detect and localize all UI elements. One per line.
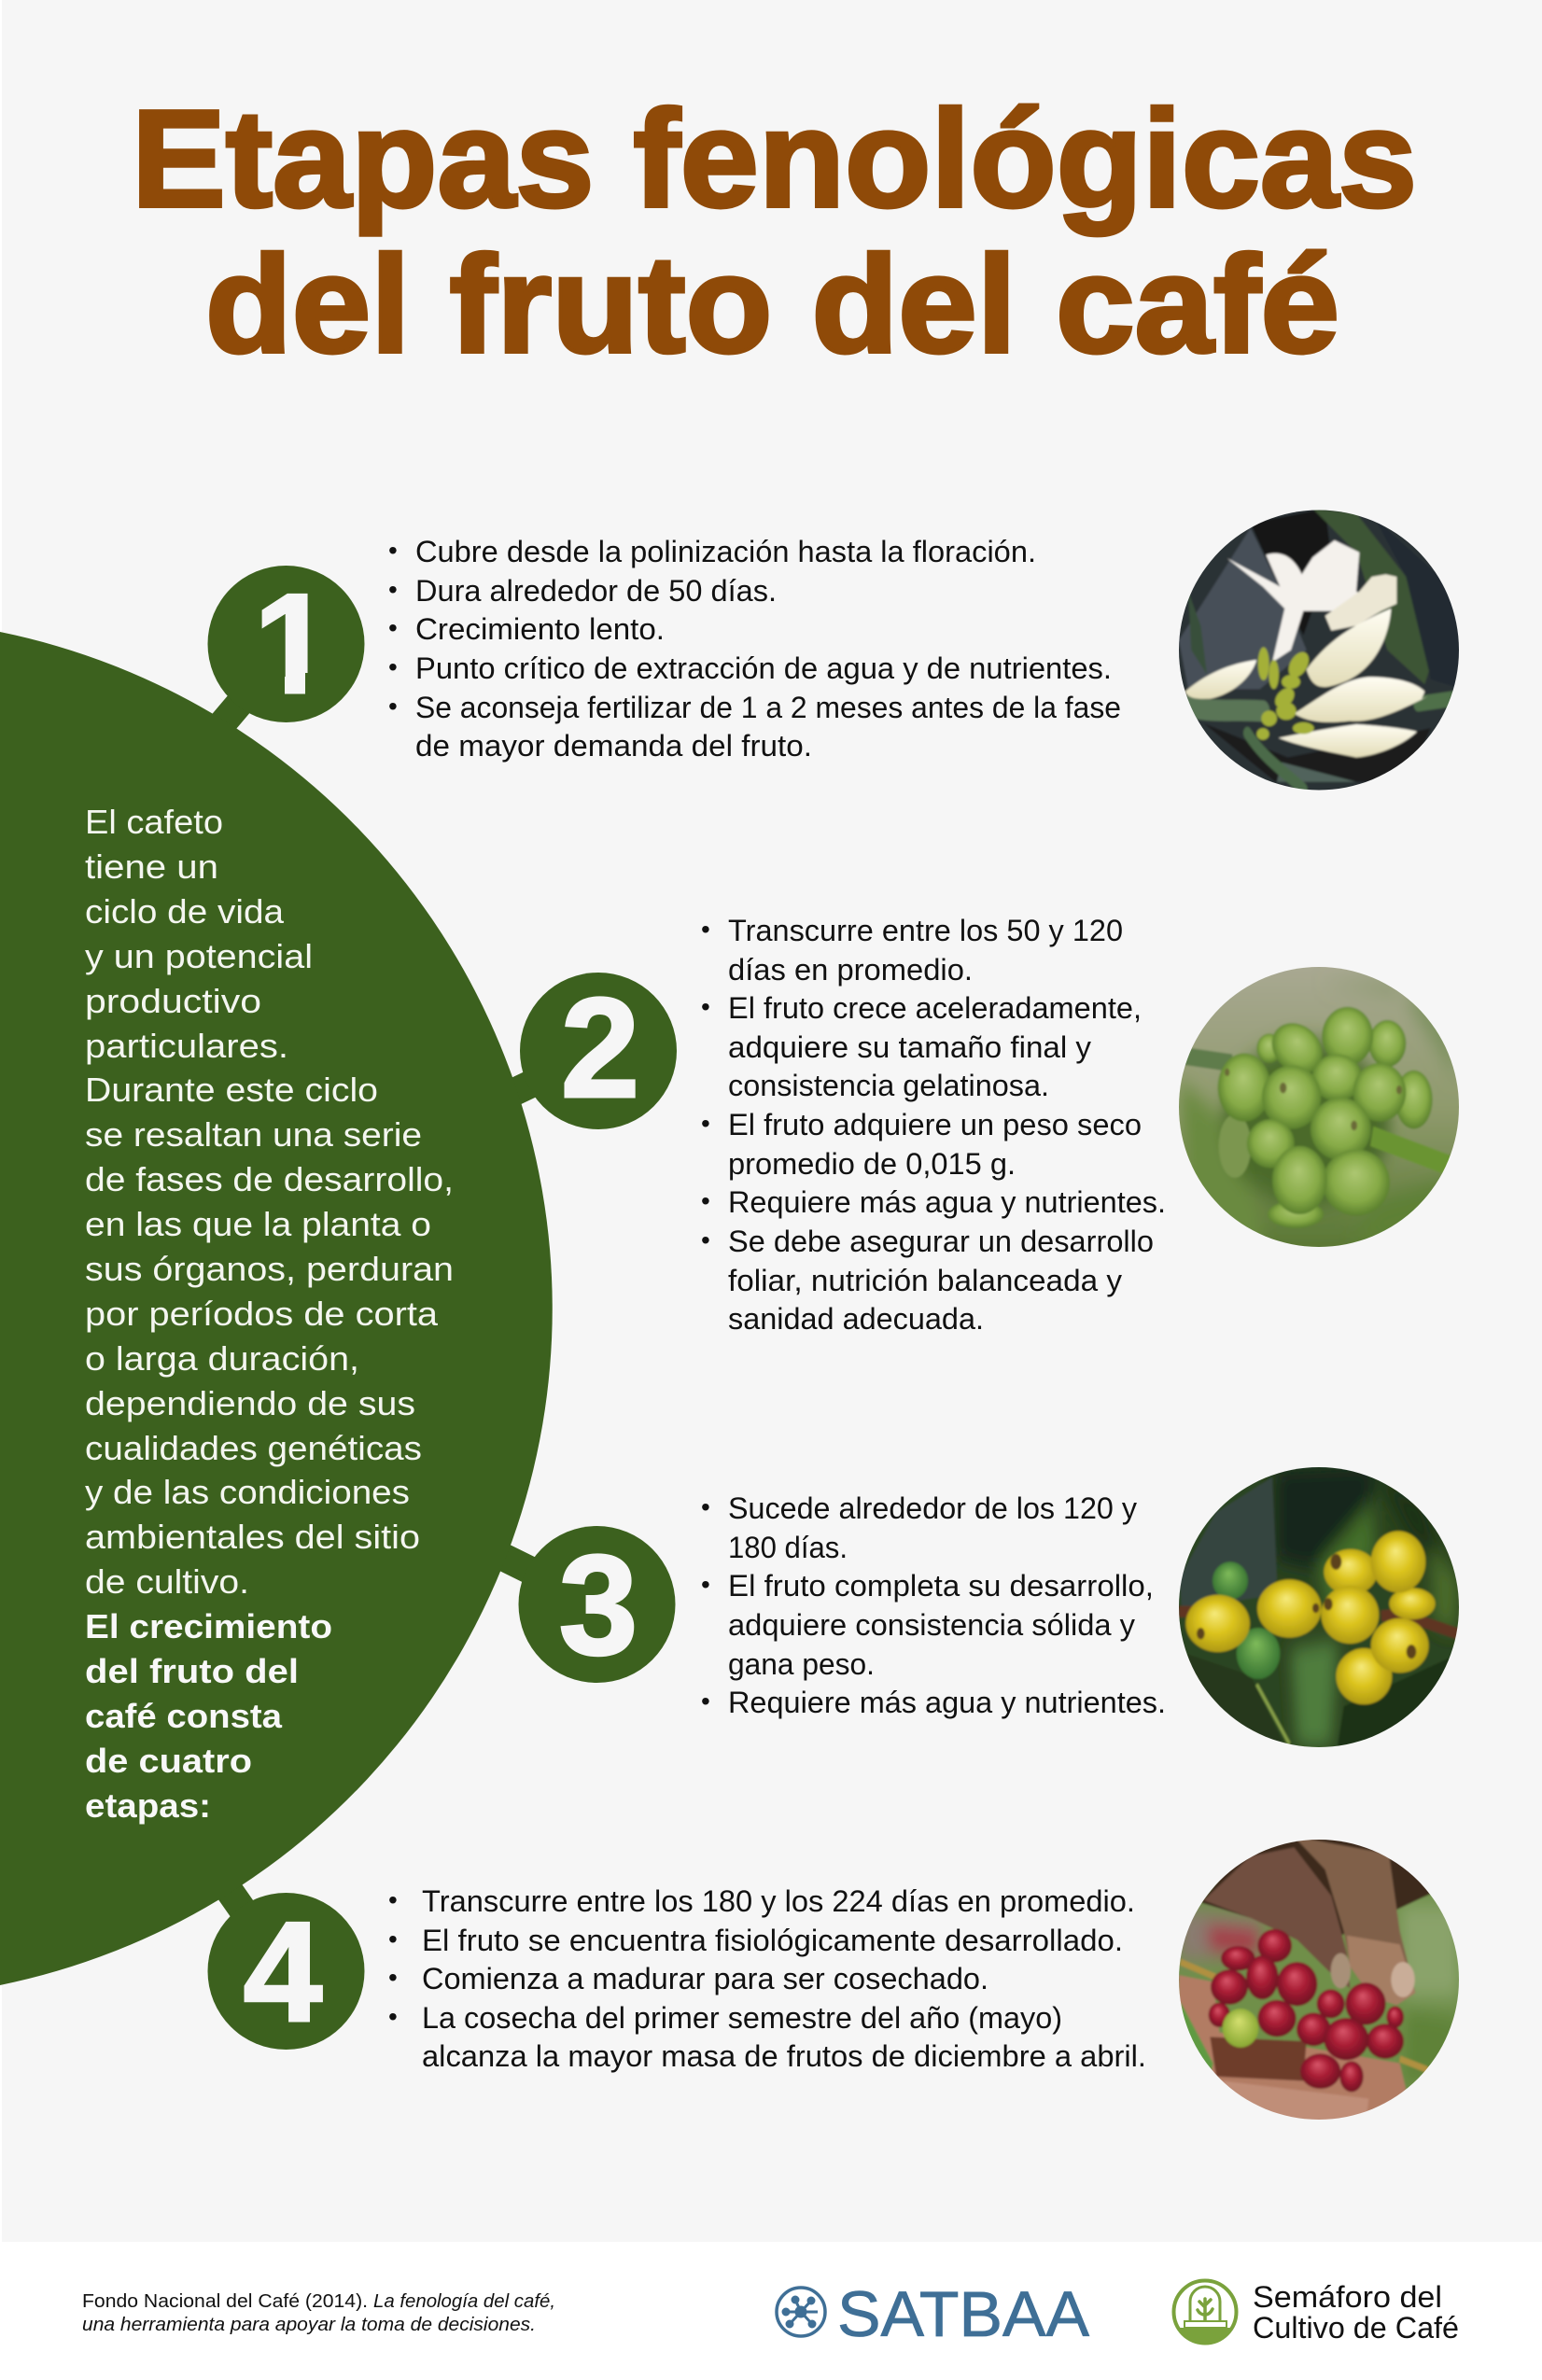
text block: stage 1 bullets: • — [388, 536, 398, 565]
title — [132, 82, 1417, 382]
intro bold statement: del fruto del — [85, 1652, 299, 1690]
text block: stage 2 bullets: • — [701, 992, 710, 1021]
intro paragraph: en las que la planta o — [85, 1205, 431, 1243]
photo: coffee flowers — [1172, 504, 1465, 796]
logo: Semáforo del Cultivo de Café — [1174, 2280, 1459, 2345]
text block: stage 4 bullets: • — [388, 2002, 398, 2031]
text block: stage 2 bullets: Requiere más agua y nutrientes. — [728, 1185, 1166, 1219]
photo: hand picking ripe red cherries — [1172, 1834, 1465, 2125]
title: Etapas fenológicas — [132, 82, 1417, 236]
text block: stage 2 bullets: promedio de 0,015 g. — [728, 1147, 1016, 1181]
icon: network circle — [777, 2288, 825, 2336]
text block: stage 3 bullets: Sucede alrededor de los 120 y — [728, 1491, 1137, 1525]
text block: stage 4 bullets: El fruto se encuentra fisiológicamente desarrollado. — [422, 1924, 1123, 1957]
intro paragraph: y un potencial — [85, 937, 313, 975]
text block: stage 2 bullets — [701, 914, 1166, 1336]
number badge 1: 1 — [254, 565, 332, 723]
text block: stage 1 bullets: • — [388, 692, 398, 721]
intro paragraph: Durante este ciclo — [85, 1071, 378, 1109]
text block: stage 3 bullets: • — [701, 1492, 710, 1521]
text block: stage 1 bullets: Cubre desde la polinización hasta la floración. — [415, 535, 1036, 568]
intro paragraph: se resaltan una serie — [85, 1115, 422, 1154]
number badge 3: 3 — [559, 1526, 638, 1685]
number badge 1 — [207, 565, 364, 723]
text block: stage 2 bullets: foliar, nutrición balanceada y — [728, 1264, 1122, 1297]
text block: stage 1 bullets: de mayor demanda del fruto. — [415, 729, 812, 763]
number badge 4 — [207, 1893, 364, 2051]
text block: stage 1 bullets: • — [388, 652, 398, 681]
citation: La fenología del café, — [373, 2291, 555, 2312]
text block: stage 2 bullets: Se debe asegurar un desarrollo — [728, 1225, 1154, 1258]
text block: stage 3 bullets: El fruto completa su desarrollo, — [728, 1569, 1154, 1603]
intro paragraph: ambientales del sitio — [85, 1518, 420, 1556]
text block: stage 2 bullets: sanidad adecuada. — [728, 1302, 984, 1336]
intro paragraph: tiene un — [85, 847, 218, 886]
text block: stage 2 bullets: El fruto crece aceleradamente, — [728, 991, 1142, 1025]
text block: stage 1 bullets — [388, 535, 1121, 763]
text block: stage 4 bullets: • — [388, 1925, 398, 1953]
number badge 3 — [519, 1526, 676, 1685]
icon: green dome with plant — [1174, 2281, 1236, 2343]
text block: stage 2 bullets: días en promedio. — [728, 953, 973, 987]
intro paragraph: dependiendo de sus — [85, 1384, 415, 1422]
text block: stage 3 bullets: • — [701, 1570, 710, 1599]
text block: stage 1 bullets: Se aconseja fertilizar de 1 a 2 meses antes de la fase — [415, 691, 1121, 724]
intro bold statement: etapas: — [85, 1786, 211, 1825]
intro bold statement: café consta — [85, 1697, 283, 1735]
text block: stage 4 bullets — [388, 1884, 1146, 2073]
text block: stage 1 bullets: • — [388, 575, 398, 604]
text block: stage 4 bullets: Comienza a madurar para ser cosechado. — [422, 1962, 988, 1995]
intro bold statement: de cuatro — [85, 1742, 252, 1780]
number badge 4: 4 — [244, 1893, 322, 2051]
title: del fruto del café — [205, 228, 1339, 382]
intro bold statement: El crecimiento — [85, 1607, 332, 1645]
photo: yellow ripening cherries — [1179, 1467, 1459, 1747]
intro paragraph: por períodos de corta — [85, 1295, 439, 1333]
text block: stage 1 bullets: • — [388, 613, 398, 642]
intro paragraph: y de las condiciones — [85, 1473, 410, 1511]
number badge 2: 2 — [561, 969, 639, 1127]
text block: stage 4 bullets: Transcurre entre los 180 y los 224 días en promedio. — [422, 1884, 1135, 1918]
text block: stage 4 bullets: • — [388, 1963, 398, 1992]
text block: stage 1 bullets: Crecimiento lento. — [415, 612, 665, 646]
text block: stage 4 bullets: alcanza la mayor masa de frutos de diciembre a abril. — [422, 2039, 1146, 2073]
intro paragraph: cualidades genéticas — [85, 1429, 422, 1467]
text block: stage 2 bullets: El fruto adquiere un peso seco — [728, 1108, 1142, 1141]
citation: una herramienta para apoyar la toma de decisiones. — [82, 2315, 536, 2335]
connector lines from central circle to number badges — [201, 648, 598, 1971]
text block: stage 1 bullets: Punto crítico de extracción de agua y de nutrientes. — [415, 651, 1112, 685]
logo: Semáforo del Cultivo de Café: Semáforo del — [1253, 2280, 1442, 2314]
text block: stage 3 bullets: adquiere consistencia sólida y — [728, 1608, 1135, 1642]
intro paragraph: de cultivo. — [85, 1562, 249, 1601]
citation — [82, 2291, 555, 2335]
intro paragraph: sus órganos, perduran — [85, 1250, 454, 1288]
text block: stage 2 bullets: • — [701, 1109, 710, 1138]
citation: Fondo Nacional del Café (2014). — [82, 2291, 368, 2312]
text block: stage 3 bullets: 180 días. — [728, 1531, 848, 1564]
intro paragraph: particulares. — [85, 1027, 288, 1065]
intro paragraph: El cafeto — [85, 803, 223, 841]
panel: central green circle with intro text — [0, 632, 553, 1985]
text block: stage 2 bullets: Transcurre entre los 50 y 120 — [728, 914, 1123, 947]
logo: SATBAA: SATBAA — [837, 2278, 1089, 2350]
text block: stage 2 bullets: adquiere su tamaño final y — [728, 1030, 1091, 1064]
text block: stage 3 bullets: Requiere más agua y nutrientes. — [728, 1686, 1166, 1719]
text block: stage 2 bullets: • — [701, 915, 710, 944]
intro paragraph: o larga duración, — [85, 1339, 359, 1378]
text block: stage 4 bullets: • — [388, 1885, 398, 1914]
intro paragraph — [85, 803, 454, 1601]
logo: Semáforo del Cultivo de Café: Cultivo de Café — [1253, 2311, 1459, 2345]
photo: green coffee cherries — [1179, 967, 1459, 1247]
text block: stage 2 bullets: • — [701, 1186, 710, 1215]
text block: stage 2 bullets: consistencia gelatinosa. — [728, 1069, 1049, 1102]
text block: stage 1 bullets: Dura alrededor de 50 días. — [415, 574, 777, 608]
intro paragraph: de fases de desarrollo, — [85, 1160, 454, 1198]
intro paragraph: ciclo de vida — [85, 892, 285, 931]
intro paragraph: productivo — [85, 982, 261, 1020]
text block: stage 4 bullets: La cosecha del primer semestre del año (mayo) — [422, 2001, 1062, 2035]
text block: stage 3 bullets: gana peso. — [728, 1647, 875, 1681]
text block: stage 3 bullets: • — [701, 1687, 710, 1715]
intro bold statement — [85, 1607, 332, 1825]
text block: stage 2 bullets: • — [701, 1225, 710, 1254]
text block: stage 3 bullets — [701, 1491, 1166, 1719]
number badge 2 — [520, 969, 677, 1129]
